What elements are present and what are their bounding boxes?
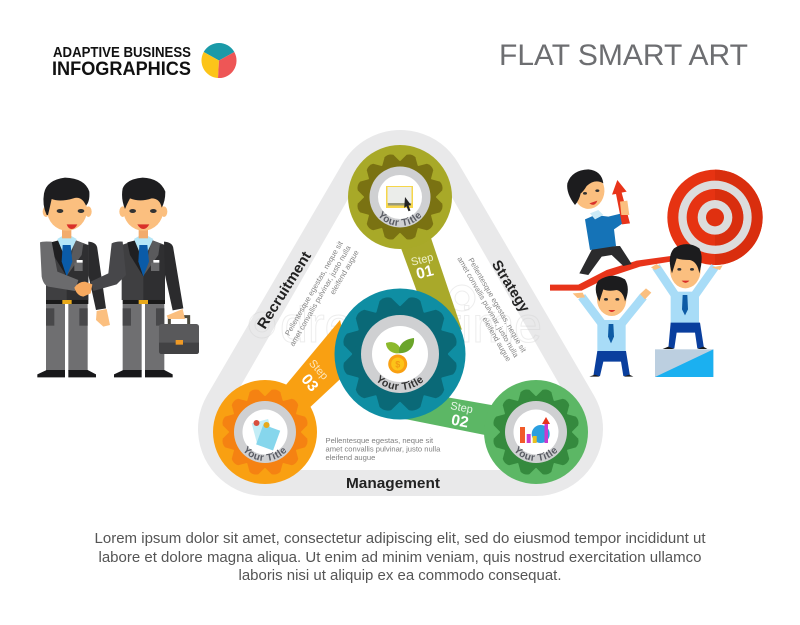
- band label: Recruitment: Recruitment: [255, 249, 315, 332]
- icon: chart and globe: [520, 417, 550, 443]
- gear: green: Your Title: [516, 446, 558, 461]
- connector: step 02: [400, 396, 497, 436]
- logo text: ADAPTIVE BUSINESS: [53, 45, 191, 61]
- illustration: team reaching the target: [550, 169, 763, 377]
- connector: step 03: [280, 320, 352, 412]
- icon: book: [386, 186, 413, 211]
- body text: laboris nisi ut aliquip ex ea commodo consequat.: [238, 568, 562, 584]
- text block: strategy: amet convallis pulvinar, justo nulla: [455, 255, 521, 360]
- briefcase: [159, 309, 199, 354]
- body text: Lorem ipsum dolor sit amet, consectetur adipiscing elit, sed do eiusmod tempor incididunt ut: [94, 531, 706, 547]
- gear: top olive: [348, 145, 452, 249]
- logo text: [52, 45, 191, 80]
- connector: step 01: [398, 238, 462, 330]
- text block: recruitment: amet convallis pulvinar, justo nulla: [288, 243, 353, 348]
- trend line: [550, 256, 671, 291]
- rounded triangle band: [260, 186, 541, 431]
- gear: green: [484, 380, 588, 484]
- text block: recruitment: eleifend augue: [328, 248, 361, 296]
- box: [655, 349, 713, 377]
- gear: top olive: Your Title: [380, 210, 422, 226]
- gear: orange: Your Title: [244, 446, 286, 461]
- watermark: dreamstime: [280, 297, 542, 353]
- illustration: two businessmen shaking hands: [37, 178, 199, 377]
- connector: step 01: 01: [414, 262, 436, 283]
- icon: resumes: [252, 419, 280, 450]
- red arrow: [612, 180, 630, 224]
- man on box: [651, 244, 723, 349]
- connector: step 02: Step: [449, 400, 474, 416]
- band label: Management: Management: [346, 476, 440, 492]
- connector: step 03: 03: [297, 371, 322, 395]
- handshake: [74, 282, 92, 297]
- band label: Strategy: Strategy: [488, 258, 532, 315]
- text block: management: [326, 436, 441, 462]
- man lower left: [573, 276, 651, 377]
- connector: step 02: 02: [450, 412, 470, 432]
- text block: recruitment: Pellentesque egestas, neque sit: [283, 239, 345, 337]
- text block: management: eleifend augue: [326, 453, 375, 462]
- logo: [52, 43, 237, 80]
- gear: center teal: Your Title: [378, 374, 423, 390]
- gear: orange: [213, 380, 317, 484]
- icon: pie: [201, 43, 237, 78]
- title: FLAT SMART ART: [499, 39, 748, 72]
- businessman left: [37, 178, 110, 377]
- logo text: INFOGRAPHICS: [52, 59, 191, 80]
- running man: [567, 169, 632, 275]
- icon: plant coin: $: [395, 360, 400, 370]
- body text: labore et dolore magna aliqua. Ut enim ad minim veniam, quis nostrud exercitation ullamco: [98, 550, 702, 566]
- connector: step 01: Step: [410, 252, 435, 269]
- target: [667, 170, 763, 265]
- text block: strategy: Pellentesque egestas, neque sit: [466, 256, 529, 355]
- connector: step 03: Step: [306, 358, 330, 382]
- text block: management: Pellentesque egestas, neque sit: [326, 436, 434, 445]
- businessman right: [91, 178, 183, 377]
- text block: strategy: eleifend augue: [480, 315, 513, 363]
- text block: management: amet convallis pulvinar, justo nulla: [326, 444, 441, 454]
- body text: [94, 531, 706, 584]
- gear: center teal: [334, 288, 466, 420]
